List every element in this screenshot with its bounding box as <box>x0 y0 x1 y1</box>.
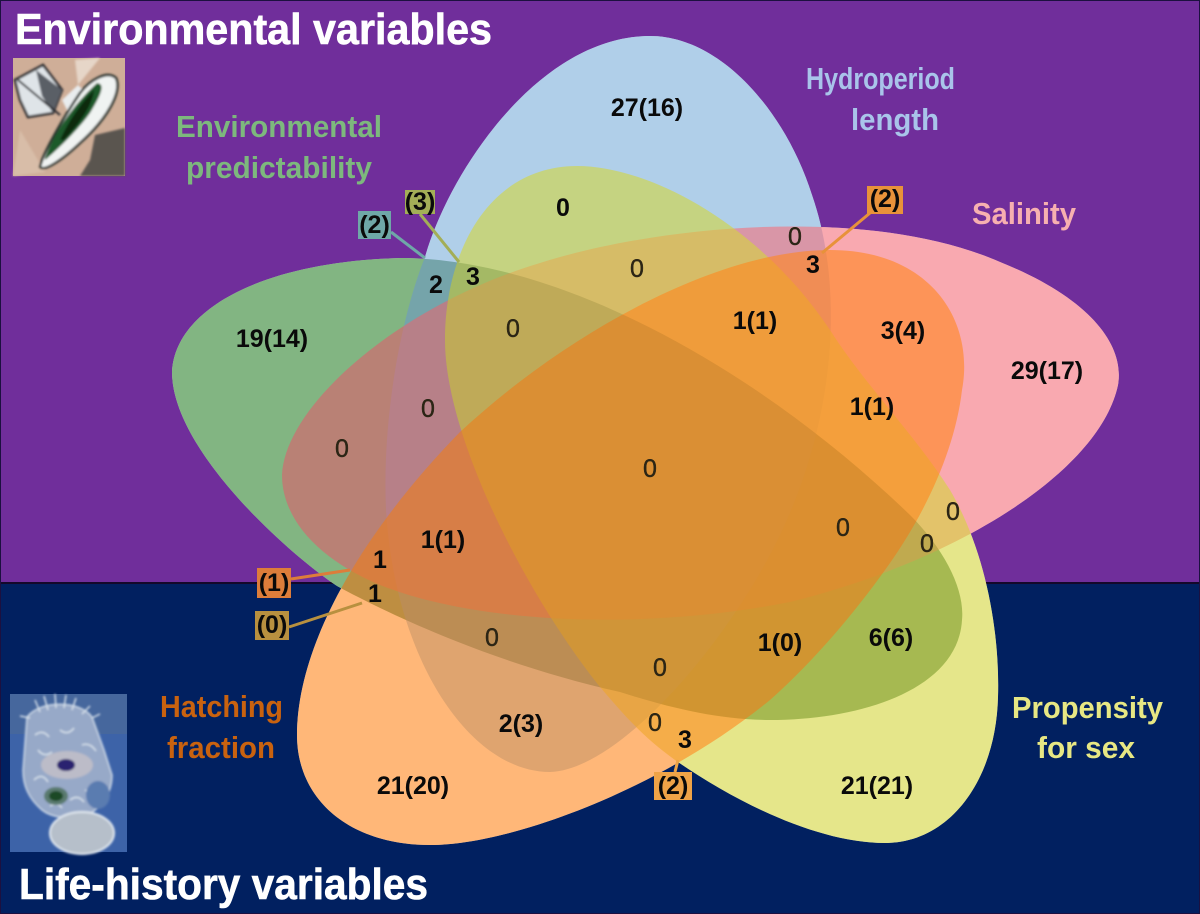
numbers: intersection counts: 21(21) <box>841 772 913 800</box>
numbers: intersection counts: 2 <box>429 271 443 299</box>
callout: (2) orange bottom <box>654 760 692 800</box>
label: hydroperiod length: Hydroperiod <box>806 61 955 96</box>
petal: environmental predictability <box>172 258 962 720</box>
numbers: intersection counts: 1 <box>373 546 387 574</box>
numbers: intersection counts: 3 <box>466 263 480 291</box>
callout: (2) orange bottom: (2) <box>658 772 688 800</box>
numbers: intersection counts: 19(14) <box>236 325 308 353</box>
numbers: intersection counts: 0 <box>506 315 520 343</box>
petal: hydroperiod length <box>385 36 831 772</box>
label: hydroperiod length <box>806 61 955 137</box>
label: environmental predictability <box>176 109 382 185</box>
numbers: intersection counts: 1(1) <box>850 393 894 421</box>
label: propensity for sex <box>1012 690 1164 765</box>
petal: hatching fraction <box>297 250 964 845</box>
photo: saline lake satellite image <box>13 58 125 176</box>
callout: (0) ochre left <box>255 603 362 640</box>
numbers: intersection counts: 29(17) <box>1011 357 1083 385</box>
callout: (2) teal <box>358 211 425 258</box>
numbers: intersection counts: 0 <box>556 194 570 222</box>
shading: overlaps with the green petal <box>282 259 962 720</box>
numbers: intersection counts: 1(0) <box>758 629 802 657</box>
callout: (2) teal: (2) <box>359 211 390 239</box>
label: propensity for sex: Propensity <box>1012 690 1164 725</box>
numbers: intersection counts: 3 <box>678 726 692 754</box>
callout: (1) orange left <box>257 568 350 598</box>
label: hatching fraction <box>160 689 283 765</box>
panel: life-history background <box>0 583 1200 914</box>
numbers: intersection counts: 0 <box>920 530 934 558</box>
label: salinity: Salinity <box>972 196 1077 231</box>
numbers: intersection counts: 2(3) <box>499 710 543 738</box>
callout: (3) olive <box>405 188 459 262</box>
label: propensity for sex: for sex <box>1037 730 1136 765</box>
label: hatching fraction: Hatching <box>160 689 283 724</box>
numbers: intersection counts: 0 <box>946 498 960 526</box>
petal: salinity <box>282 226 1119 620</box>
numbers: intersection counts: 0 <box>643 455 657 483</box>
label: hydroperiod length: length <box>851 102 939 137</box>
numbers: intersection counts: 3 <box>806 251 820 279</box>
numbers: intersection counts: 1(1) <box>421 526 465 554</box>
numbers: intersection counts: 21(20) <box>377 772 449 800</box>
heading: environmental variables: Environmental variables <box>15 5 492 54</box>
numbers: intersection counts: 0 <box>485 624 499 652</box>
numbers: intersection counts: 1(1) <box>733 307 777 335</box>
label: environmental predictability: Environmental <box>176 109 382 144</box>
numbers: intersection counts: 0 <box>788 223 802 251</box>
label: hatching fraction: fraction <box>167 730 275 765</box>
numbers: intersection counts: 6(6) <box>869 624 913 652</box>
numbers: intersection counts: 3(4) <box>881 317 925 345</box>
petal: propensity for sex <box>445 166 998 843</box>
photo: rotifer micrograph <box>10 694 127 854</box>
callout: (1) orange left: (1) <box>259 569 289 597</box>
callout: (2) orange top right: (2) <box>870 185 900 213</box>
heading: life-history variables: Life-history variables <box>19 860 428 909</box>
numbers: intersection counts: 0 <box>648 709 662 737</box>
numbers: intersection counts: 0 <box>630 255 644 283</box>
numbers: intersection counts: 0 <box>836 514 850 542</box>
numbers: intersection counts <box>236 94 1083 800</box>
numbers: intersection counts: 0 <box>653 654 667 682</box>
numbers: intersection counts: 27(16) <box>611 94 683 122</box>
callout: (0) ochre left: (0) <box>257 611 287 639</box>
callout: (2) orange top right <box>822 185 903 253</box>
numbers: intersection counts: 1 <box>368 580 382 608</box>
callout: (3) olive: (3) <box>405 188 435 216</box>
panel: environmental background <box>0 0 1200 583</box>
numbers: intersection counts: 0 <box>335 435 349 463</box>
label: environmental predictability: predictability <box>186 150 373 185</box>
numbers: intersection counts: 0 <box>421 395 435 423</box>
venn diagram <box>172 36 1119 845</box>
